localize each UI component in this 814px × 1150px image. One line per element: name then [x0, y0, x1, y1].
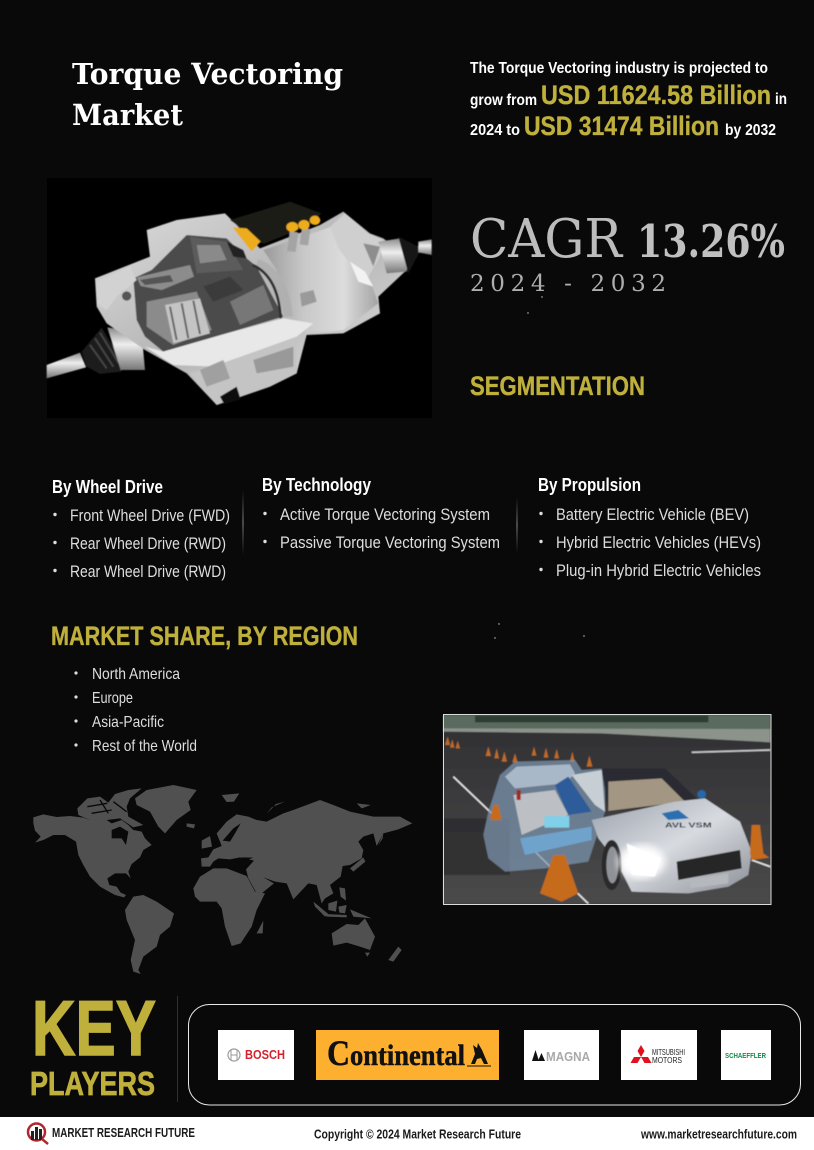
- image: car on test track: [443, 714, 771, 904]
- heading: market share by region: MARKET SHARE, BY REGION: [51, 621, 358, 651]
- market forecast statement: USD 11624.58 Billion: [541, 80, 771, 110]
- segment: by technology: [262, 475, 500, 552]
- logo: Bosch: BOSCH: [245, 1048, 285, 1062]
- footer: Copyright © 2024 Market Research Future: [314, 1126, 521, 1142]
- logo: Magna: [524, 1030, 599, 1080]
- market forecast statement: in: [775, 91, 787, 108]
- market forecast statement: The Torque Vectoring industry is projected to: [470, 60, 768, 77]
- engine motor housing: [263, 227, 378, 333]
- segment: by wheel drive: Rear Wheel Drive (RWD): [70, 562, 226, 581]
- segment: by technology: Active Torque Vectoring System: [280, 505, 490, 524]
- segment: by propulsion: By Propulsion: [538, 475, 641, 495]
- segment: by wheel drive: Rear Wheel Drive (RWD): [70, 534, 226, 553]
- world map: [33, 785, 412, 974]
- footer: MARKET RESEARCH FUTURE: [52, 1125, 195, 1140]
- title: Torque Vectoring: [72, 57, 343, 91]
- logo: Continental: Continental: [327, 1033, 465, 1073]
- heading: key players: [30, 984, 156, 1102]
- heading: key players: PLAYERS: [30, 1065, 155, 1102]
- title: [72, 57, 343, 132]
- region list: Europe: [92, 690, 133, 707]
- segment: by technology: By Technology: [262, 475, 371, 495]
- segment: by propulsion: Hybrid Electric Vehicles (HEVs): [556, 533, 761, 552]
- title: Market: [72, 98, 184, 132]
- footer: [0, 1117, 814, 1150]
- segment: by wheel drive: By Wheel Drive: [52, 477, 163, 497]
- market forecast statement: USD 31474 Billion: [524, 111, 719, 141]
- segment: by propulsion: [538, 475, 761, 580]
- market forecast statement: 2024 to: [470, 122, 520, 139]
- market forecast statement: [470, 60, 787, 141]
- CAGR figure: 2024 - 2032: [470, 271, 666, 297]
- logo: Mitsubishi Motors: [621, 1030, 697, 1080]
- logo: Schaeffler: [721, 1030, 771, 1080]
- panel: company logos: [188, 1004, 800, 1105]
- CAGR figure: [470, 209, 785, 297]
- segment: by propulsion: Plug-in Hybrid Electric Vehicles: [556, 561, 761, 580]
- market forecast statement: by 2032: [725, 122, 776, 139]
- logo: Magna: MAGNA: [546, 1050, 590, 1064]
- logo: Continental: [316, 1030, 499, 1080]
- region list: North America: [92, 666, 180, 683]
- logo: Mitsubishi Motors: MITSUBISHI: [652, 1047, 685, 1057]
- logo: Mitsubishi Motors: MOTORS: [652, 1055, 682, 1065]
- CAGR figure: CAGR: [470, 209, 624, 270]
- logo: Schaeffler: SCHAEFFLER: [725, 1051, 766, 1060]
- segment: by wheel drive: [52, 477, 230, 581]
- region list: Asia-Pacific: [92, 714, 164, 731]
- market forecast statement: grow from: [470, 92, 537, 109]
- region list: Rest of the World: [92, 738, 197, 755]
- region list: [74, 666, 197, 755]
- image: torque vectoring drive unit: [47, 178, 432, 418]
- image: car on test track: AVL VSM: [665, 821, 712, 830]
- segment: by propulsion: Battery Electric Vehicle (BEV): [556, 505, 749, 524]
- footer logo icon: [28, 1124, 48, 1144]
- stray dots: [494, 296, 585, 639]
- heading: segmentation: SEGMENTATION: [470, 371, 645, 401]
- logo: Bosch: [218, 1030, 294, 1080]
- segment: by wheel drive: Front Wheel Drive (FWD): [70, 506, 230, 525]
- segment: by technology: Passive Torque Vectoring System: [280, 533, 500, 552]
- heading: key players: KEY: [32, 984, 156, 1072]
